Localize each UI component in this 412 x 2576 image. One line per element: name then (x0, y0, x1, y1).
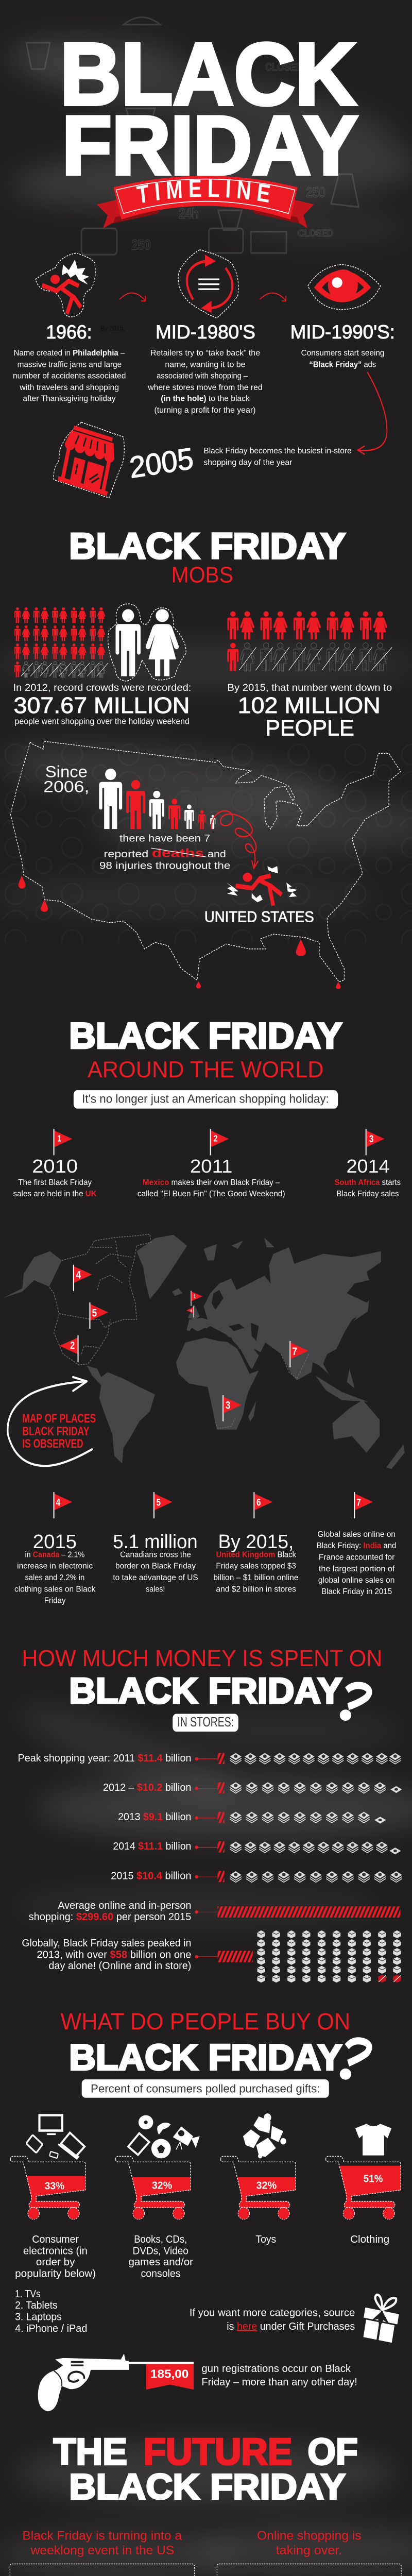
row: 2011: Peak shopping year: 2011 $11.4 billion (18, 1752, 191, 1764)
callout: map of places (8, 1377, 96, 1466)
row: 2015: 2015 $10.4 billion (111, 1870, 191, 1882)
heading: future: THE (54, 2431, 127, 2472)
text: more categories: If you want more categories, source (190, 2307, 355, 2319)
milestone: 2005: 2005 (128, 442, 195, 485)
faint chalk icons (26, 17, 358, 255)
pictogram: 2012 crowd (14, 607, 108, 677)
cart: media: 32% (152, 2180, 172, 2192)
item: 2010: The first Black Friday (18, 1178, 92, 1187)
icon: fallen person (227, 866, 298, 906)
row: global sales: 2013, with over $58 billion on one (37, 1948, 191, 1960)
item: by 2015 UK: By 2015, (218, 1531, 294, 1553)
stat: 2012: In 2012, record crowds were recorded: (13, 682, 191, 693)
milestone: 1966: massive traffic jams and large (18, 360, 122, 369)
labels: categories: Clothing (350, 2233, 389, 2245)
heading (69, 526, 346, 588)
stat: 2015: PEOPLE (265, 716, 354, 740)
arrow (260, 293, 286, 301)
item: 2011 (138, 1129, 285, 1199)
text: since 2006: 2006, (43, 778, 89, 796)
heading: future: OF (307, 2431, 358, 2472)
milestone: 2005 (128, 442, 352, 485)
milestone: 2005: Black Friday becomes the busiest in-store (203, 447, 352, 456)
item: 2011: Mexico makes their own Black Friday – (143, 1178, 280, 1187)
map seas (192, 1259, 271, 1369)
pill: percent of consumers (82, 2079, 329, 2098)
row: global sales (22, 1937, 253, 1972)
labels: categories: Toys (255, 2233, 276, 2245)
list: electronics: 1. TVs (15, 2288, 41, 2300)
item: by 2015 UK: 6 (256, 1497, 261, 1508)
section: around the world (3, 1015, 405, 1605)
item: 2015 Canada: sales and 2.2% in (25, 1573, 84, 1582)
row: 2015 (111, 1870, 402, 1883)
text: gun registrations: gun registrations occur on Black (201, 2363, 351, 2375)
panel: weeklong (10, 2564, 195, 2576)
icon: t-shirt (355, 2124, 391, 2156)
item: 2015 Canada (14, 1492, 96, 1605)
milestone: 1966: Name created in Philadelphia – (14, 349, 125, 358)
milestone: mid-1990s: Consumers start seeing (301, 349, 384, 358)
cart: electronics: 33% (45, 2180, 64, 2192)
item: 2010: 2010 (32, 1156, 78, 1177)
row: global sales: Globally, Black Friday sales peaked in (22, 1937, 191, 1949)
row: 2014 (113, 1840, 401, 1855)
icon: gift (360, 2293, 401, 2343)
item: by 2015 UK: billion – $1 billion online (213, 1573, 299, 1582)
list: electronics: 3. Laptops (15, 2311, 62, 2323)
pictogram: 2015 crowd (227, 612, 392, 671)
cart: clothing: 51% (364, 2173, 383, 2185)
icon: falling person (36, 253, 95, 317)
section: gifts (10, 2069, 401, 2507)
item: global online: France accounted for (319, 1553, 395, 1562)
text: gun registrations: Friday – more than any other day! (201, 2376, 357, 2388)
heading: online: taking over. (276, 2543, 342, 2557)
icon: eye (308, 264, 381, 310)
label: United States: UNITED STATES (204, 908, 314, 925)
ribbon: timeline (97, 176, 314, 229)
text: gun registrations (201, 2363, 357, 2388)
item: by 2015 UK: Friday sales topped $3 (216, 1562, 296, 1571)
heading: future (54, 2431, 358, 2507)
heading: what do people buy: WHAT DO PEOPLE BUY ON (60, 2008, 350, 2035)
text: since 2006: reported (104, 848, 148, 859)
labels: categories: games and/or (128, 2256, 194, 2268)
flags on map: 7 (292, 1345, 297, 1358)
milestone: mid-1980s: MID-1980'S (156, 322, 255, 343)
milestone: mid-1980s: name, wanting it to be (165, 360, 246, 369)
labels: categories: electronics (in (23, 2245, 88, 2257)
heading: BLACK FRIDAY (69, 1015, 342, 1056)
flags on map: 1 (194, 1294, 196, 1300)
banner: 185,00 (146, 2364, 194, 2389)
item: global online: 7 (356, 1497, 361, 1508)
icon: cycle (178, 250, 238, 318)
item: 5.1 million (113, 1492, 198, 1594)
stat: 2015: By 2015, that number went down to (227, 682, 392, 693)
list: electronics: 4. iPhone / iPad (15, 2323, 87, 2334)
labels: categories: consoles (141, 2268, 181, 2280)
row: average spend (29, 1899, 401, 1923)
row: global sales: day alone! (Online and in store) (48, 1959, 191, 1972)
stat: 2012: 307.67 MILLION (14, 693, 190, 718)
stat: 2015 (227, 682, 392, 740)
title: BLACK (60, 25, 356, 123)
milestone: mid-1980s: where stores move from the red (147, 383, 263, 392)
heading: weeklong: Black Friday is turning into a (22, 2529, 182, 2543)
heading: weeklong: weeklong event in the US (30, 2543, 174, 2557)
item: 2015 Canada: clothing sales on Black (14, 1585, 96, 1594)
stat: 2015: 102 MILLION (238, 693, 381, 718)
stray text: By 2015, (100, 325, 125, 332)
text: since 2006: there have been 7 (119, 833, 210, 844)
callout: map of places: BLACK FRIDAY (22, 1424, 90, 1438)
pictogram: descending people (99, 769, 215, 829)
section: future (10, 2529, 401, 2576)
heading: what do people buy (60, 2008, 369, 2078)
ribbon: timeline: TIMELINE (136, 179, 270, 203)
section: timeline (13, 16, 395, 499)
item: global online: the largest portion of (319, 1565, 395, 1573)
item: global online (317, 1492, 396, 1596)
item: 2014 (334, 1129, 401, 1199)
heading: future: BLACK FRIDAY (69, 2467, 346, 2507)
flags on map: 4 (76, 1269, 81, 1281)
cart: media (115, 2156, 191, 2219)
stat: 2012 (13, 682, 191, 726)
row: 2013: 2013 $9.1 billion (118, 1810, 191, 1823)
map: world (3, 1234, 405, 1469)
labels: categories: popularity below) (15, 2268, 96, 2280)
milestone: mid-1980s: (in the hole) to the black (161, 395, 250, 403)
item: global online: global online sales on (318, 1576, 394, 1585)
flags on map: 3 (226, 1399, 230, 1412)
item: 2015 Canada: 4 (56, 1497, 61, 1508)
milestone: mid-1980s: associated with shopping – (157, 371, 248, 381)
labels: categories: DVDs, Video (133, 2245, 188, 2257)
labels: categories: Books, CDs, (134, 2233, 187, 2245)
text: since 2006: Since (45, 763, 88, 781)
list: electronics: 2. Tablets (15, 2299, 58, 2311)
section: mobs (10, 526, 401, 989)
item: global online: Global sales online on (317, 1530, 396, 1539)
faint chalk icons: CLOSED (298, 227, 333, 239)
faint chalk icons: 250 (306, 184, 325, 200)
milestone: mid-1980s (147, 322, 263, 415)
item: by 2015 UK: and $2 billion in stores (216, 1585, 296, 1594)
pictogram: boxes (257, 1930, 401, 1982)
item: 2015 Canada: 2015 (33, 1531, 77, 1553)
item: 2011: 2 (214, 1133, 218, 1144)
labels: categories (15, 2233, 389, 2280)
faint chalk icons: CLOSED (265, 61, 303, 74)
item: 2011: called "El Buen Fin" (The Good Weekend) (138, 1190, 285, 1199)
icon: couple (108, 604, 186, 681)
section: money spent (18, 1645, 402, 2078)
panel: online (217, 2564, 401, 2576)
row: 2011 (18, 1752, 401, 1765)
milestone: mid-1980s: Retailers try to “take back” the (150, 349, 260, 358)
item: 2014: 3 (369, 1133, 373, 1144)
item: 5.1 million: to take advantage of US (113, 1573, 198, 1582)
arrow (119, 293, 145, 301)
row: 2014: 2014 $11.1 billion (113, 1840, 191, 1852)
text: since 2006: and (208, 848, 226, 859)
heading: weeklong (22, 2529, 182, 2557)
heading: HOW MUCH MONEY IS SPENT ON (22, 1645, 382, 1671)
stat: 2012: people went shopping over the holiday weekend (15, 717, 190, 726)
icon: media (128, 2115, 200, 2158)
map: United States (10, 741, 401, 989)
milestone: 1966: 1966: (46, 322, 92, 343)
text: since 2006: deaths (152, 846, 204, 860)
milestone: 2005: shopping day of the year (203, 458, 293, 467)
item: 2010 (13, 1129, 97, 1199)
cart: toys (221, 2156, 296, 2219)
item: 2010: sales are held in the UK (13, 1190, 97, 1199)
item: 5.1 million: 5 (157, 1497, 161, 1508)
heading: online (257, 2529, 362, 2557)
text: since 2006: 98 injuries throughout the (99, 860, 230, 871)
labels: categories: Consumer (32, 2233, 79, 2245)
arrow: to 2005 (358, 372, 387, 454)
heading: future: FUTURE (144, 2431, 292, 2472)
text: since 2006 (43, 763, 230, 871)
item: 2015 Canada: increase in electronic (17, 1562, 93, 1571)
title (60, 25, 358, 192)
icon: puzzle (243, 2113, 286, 2158)
item: 2014: Black Friday sales (337, 1190, 399, 1199)
row: 2012: 2012 – $10.2 billion (103, 1781, 191, 1793)
flags on map: 5 (92, 1307, 97, 1319)
milestone: mid-1990s: “Black Friday” ads (310, 360, 376, 369)
milestone: mid-1990s: MID-1990'S: (290, 322, 395, 343)
item: 2015 Canada: Friday (44, 1596, 66, 1605)
callout pill (74, 1090, 338, 1109)
heading: what do people buy: BLACK FRIDAY (69, 2037, 342, 2078)
cart: electronics (10, 2156, 85, 2219)
list: electronics (15, 2288, 87, 2334)
item: 2011: 2011 (190, 1156, 233, 1177)
milestone: 1966: after Thanksgiving holiday (23, 395, 116, 403)
heading: BLACK FRIDAY (69, 1671, 342, 1711)
item: by 2015 UK: United Kingdom Black (216, 1550, 297, 1560)
heading: AROUND THE WORLD (88, 1056, 324, 1082)
heading: MOBS (171, 563, 233, 588)
question mark dot (340, 2069, 351, 2080)
pill: in stores: IN STORES: (177, 1715, 234, 1729)
text: more categories (190, 2307, 355, 2332)
heading: BLACK FRIDAY (69, 526, 346, 567)
item: by 2015 UK (213, 1492, 299, 1594)
text: more categories: is here under Gift Purchases (227, 2320, 355, 2332)
item: 5.1 million: sales! (146, 1585, 165, 1594)
flags on map: 2 (70, 1339, 75, 1351)
callout pill: It's no longer just an American shopping holiday: (82, 1092, 329, 1106)
row: average spend: Average online and in-person (58, 1899, 191, 1911)
labels: categories: order by (36, 2256, 75, 2268)
milestone: 1966 (13, 322, 126, 403)
row: 2013 (118, 1810, 386, 1824)
heading: online: Online shopping is (257, 2529, 362, 2543)
item: 5.1 million: 5.1 million (113, 1531, 198, 1553)
item: global online: Black Friday: India and (317, 1541, 396, 1551)
title: FRIDAY (62, 99, 358, 192)
item: 2014: South Africa starts (334, 1178, 401, 1187)
item: 5.1 million: Canadians cross the (120, 1550, 191, 1560)
faint chalk icons: 24h (179, 206, 199, 222)
arrow: spiral (212, 811, 259, 869)
item: global online: Black Friday in 2015 (321, 1587, 392, 1596)
milestone: mid-1980s: (turning a profit for the year) (154, 406, 255, 415)
flags on map: 6 (191, 1309, 192, 1313)
pill: percent of consumers: Percent of consumers polled purchased gifts: (91, 2082, 320, 2095)
item: 2014: 2014 (346, 1156, 390, 1177)
banner: 185,00: 185,00 (150, 2367, 188, 2381)
item: 2010: 1 (57, 1133, 61, 1144)
row: average spend: shopping: $299.60 per person 2015 (29, 1910, 191, 1923)
milestone: 1966: number of accidents associated (13, 371, 126, 381)
item: 5.1 million: border on Black Friday (115, 1562, 196, 1571)
icon: store (54, 422, 124, 498)
item: 2015 Canada: in Canada – 2.1% (25, 1550, 84, 1560)
callout: map of places: IS OBSERVED (22, 1436, 83, 1451)
heading (69, 1015, 342, 1082)
heading (22, 1645, 382, 1721)
flags on map (59, 1265, 308, 1421)
faint chalk icons: 250 (131, 237, 151, 253)
row: 2012 (103, 1781, 402, 1794)
cart: clothing (326, 2156, 401, 2219)
milestone: 1966: with travelers and shopping (19, 383, 119, 392)
callout: map of places: MAP OF PLACES (22, 1411, 96, 1425)
milestone: mid-1990s (290, 322, 395, 369)
icon: electronics (26, 2115, 84, 2158)
icon: gun (38, 2353, 194, 2411)
cart: toys: 32% (256, 2180, 277, 2192)
